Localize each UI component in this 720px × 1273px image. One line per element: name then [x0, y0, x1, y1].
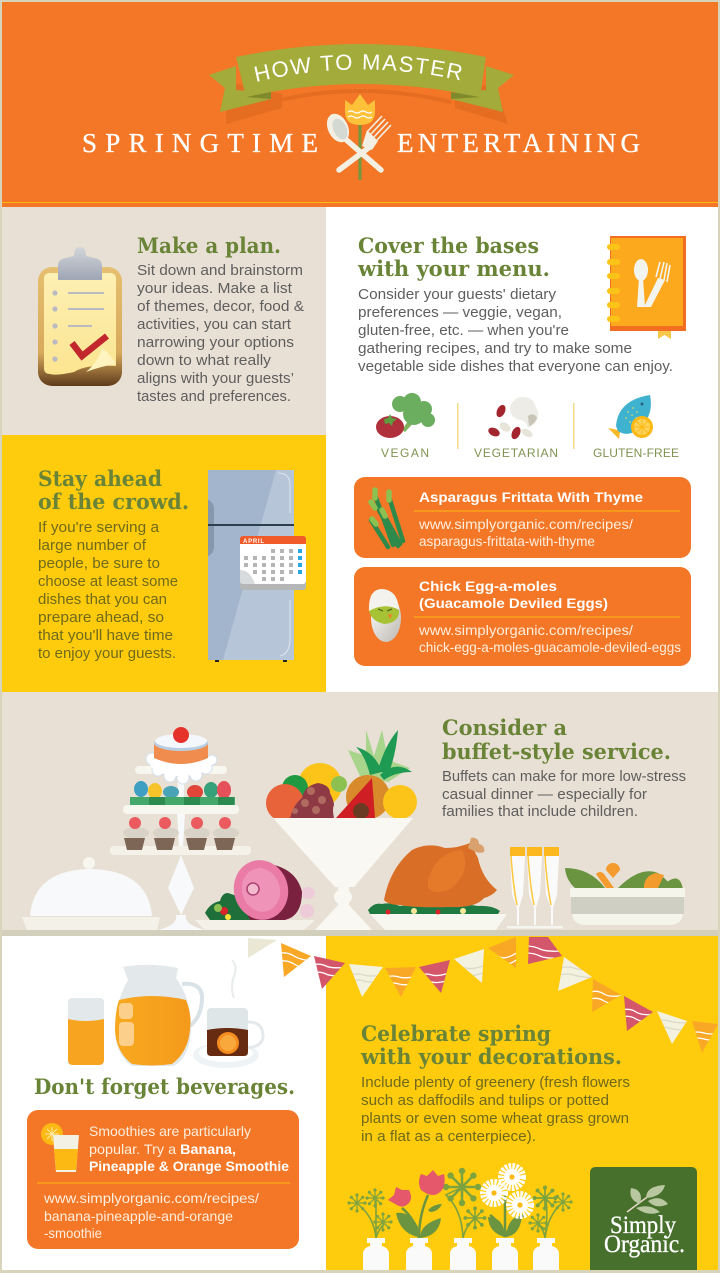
icon: smoothie glass — [41, 1123, 79, 1172]
heading: make a plan: Make a plan. — [137, 234, 281, 259]
body: celebrate: Include plenty of greenery (fresh flowers — [361, 1074, 630, 1091]
illustration: tea cup — [193, 960, 263, 1068]
icon: refrigerator — [208, 470, 294, 662]
logo leaves — [627, 1185, 668, 1214]
body: stay ahead: to enjoy your guests. — [38, 645, 176, 662]
illustration: salad bowl — [565, 863, 685, 925]
icon: menu notebook — [607, 236, 686, 339]
heading: cover the bases: Cover the bases — [358, 234, 539, 259]
card: smoothie — [27, 1110, 299, 1249]
icon: guacamole egg — [369, 589, 401, 642]
panel: buffet service — [2, 692, 718, 936]
heading: beverages: Don't forget beverages. — [34, 1075, 295, 1100]
illustration: covered dome platter — [22, 857, 160, 930]
divider — [573, 403, 574, 449]
heading: celebrate: with your decorations. — [360, 1045, 622, 1070]
icon: tulip with spoon and fork — [323, 94, 391, 180]
body: make a plan: activities, you can start — [137, 316, 292, 333]
logo: simply organic: Simply — [610, 1212, 676, 1239]
bunting garland — [248, 937, 720, 1053]
body: buffet: casual dinner — especially for — [442, 786, 647, 803]
flower vases — [347, 1168, 573, 1270]
body: cover the bases: vegetable side dishes that everyone can enjoy. — [358, 358, 673, 375]
heading: celebrate: Celebrate spring — [361, 1022, 551, 1047]
doily and cake — [146, 727, 217, 784]
easter eggs on grass — [130, 781, 235, 805]
card: smoothie: www.simplyorganic.com/recipes/ — [43, 1190, 259, 1206]
body: make a plan: down to what really — [137, 352, 272, 369]
body: make a plan — [137, 262, 304, 405]
title: entertaining: ENTERTAINING — [397, 128, 640, 158]
heading: stay ahead: Stay ahead — [38, 467, 162, 492]
body: make a plan: aligns with your guests’ — [137, 370, 294, 387]
label: vegetarian: VEGETARIAN — [474, 446, 558, 460]
body: stay ahead: large number of — [38, 537, 147, 554]
ribbon text: HOW TO MASTER — [254, 54, 462, 82]
body: cover the bases — [358, 286, 673, 375]
body: stay ahead: that you'll have time — [38, 627, 173, 644]
illustration: roast turkey — [368, 838, 507, 930]
panel: celebrate spring — [326, 936, 718, 1270]
label: vegan: VEGAN — [381, 446, 429, 460]
body: stay ahead: choose at least some — [38, 573, 178, 590]
panel: header — [2, 2, 718, 207]
icon: vegan tomato and broccoli — [376, 393, 435, 438]
icon: clipboard — [38, 247, 122, 386]
body: buffet — [442, 768, 686, 820]
body: buffet: families that include children. — [442, 803, 638, 820]
icon: calendar — [240, 536, 306, 590]
icon: vegetarian mushrooms and beans — [487, 397, 538, 441]
card: chick egg-a-moles: chick-egg-a-moles-guacamole-deviled-eggs — [419, 639, 681, 655]
card: smoothie: -smoothie — [44, 1225, 102, 1241]
text: smoothie: Smoothies are particularly — [89, 1123, 251, 1139]
illustration: fruit bowl — [266, 730, 417, 930]
heading: cover the bases — [357, 234, 550, 282]
body: celebrate: plants or even some wheat grass grown — [361, 1110, 629, 1127]
title: springtime: SPRINGTIME — [82, 128, 318, 158]
label: gluten-free: GLUTEN-FREE — [593, 446, 679, 460]
body: make a plan: Sit down and brainstorm — [137, 262, 303, 279]
heading: buffet — [442, 716, 671, 765]
icon: asparagus — [371, 490, 403, 547]
body: make a plan: tastes and preferences. — [137, 388, 291, 405]
body: make a plan: narrowing your options — [137, 334, 294, 351]
body: make a plan: your ideas. Make a list — [137, 280, 293, 297]
icon: calendar: APRIL — [243, 539, 264, 545]
card: chick egg-a-moles — [354, 567, 691, 666]
daisies — [484, 1168, 530, 1237]
body: stay ahead: people, be sure to — [38, 555, 160, 572]
body: buffet: Buffets can make for more low-stress — [442, 768, 686, 785]
ribbon banner — [209, 44, 514, 124]
body: celebrate: in a flat as a centerpiece). — [361, 1128, 536, 1145]
heading: stay ahead: of the crowd. — [38, 490, 189, 515]
illustration: tiered dessert stand — [110, 727, 251, 930]
tulips — [388, 1170, 445, 1238]
card: chick egg-a-moles: www.simplyorganic.com/recipes/ — [418, 622, 633, 638]
card: smoothie: popular. Try a Banana, — [89, 1141, 236, 1157]
panel: beverages — [2, 936, 326, 1270]
card: smoothie: Pineapple & Orange Smoothie — [89, 1158, 289, 1174]
illustration: juice pitcher — [115, 965, 202, 1066]
card: asparagus frittata: asparagus-frittata-with-thyme — [419, 533, 595, 549]
heading: stay ahead — [38, 467, 189, 515]
green sprigs — [347, 1168, 573, 1238]
cupcakes — [123, 817, 239, 850]
body: make a plan: of themes, decor, food & — [137, 298, 304, 315]
body: celebrate — [361, 1074, 630, 1145]
card: asparagus frittata: Asparagus Frittata With Thyme — [419, 489, 643, 505]
card: chick egg-a-moles: Chick Egg-a-moles — [419, 578, 557, 594]
heading: cover the bases: with your menu. — [357, 257, 550, 282]
body: cover the bases: gluten-free, etc. — when you're — [358, 322, 569, 339]
icon: gluten-free fish with lemon — [608, 395, 653, 439]
body: stay ahead: dishes that you can — [38, 591, 167, 608]
panel: make a plan — [2, 207, 326, 435]
heading: celebrate — [360, 1022, 622, 1070]
body: celebrate: such as daffodils and tulips or potted — [361, 1092, 609, 1109]
card: smoothie: banana-pineapple-and-orange — [44, 1208, 233, 1224]
logo: simply organic — [590, 1167, 697, 1270]
body: cover the bases: Consider your guests' dietary — [358, 286, 557, 303]
heading: buffet: buffet-style service. — [442, 740, 671, 765]
card: chick egg-a-moles: (Guacamole Deviled Eggs) — [419, 595, 608, 611]
card: asparagus frittata: www.simplyorganic.com/recipes/ — [418, 516, 633, 532]
heading: buffet: Consider a — [442, 716, 567, 741]
body: stay ahead: If you're serving a — [38, 519, 160, 536]
logo: simply organic: Organic. — [604, 1231, 685, 1258]
pennant waves — [280, 946, 720, 1040]
card: asparagus frittata — [354, 477, 691, 558]
body: cover the bases: preferences — veggie, vegan, — [358, 304, 562, 321]
white vases — [363, 1238, 559, 1270]
illustration: ham on platter — [195, 854, 315, 930]
illustration: champagne flutes — [507, 847, 563, 928]
illustration: glass of juice — [68, 998, 104, 1065]
panel: stay ahead — [2, 435, 326, 692]
body: stay ahead — [38, 519, 178, 662]
panel: cover the bases — [326, 207, 718, 692]
body: cover the bases: gathering recipes, and try to make some — [358, 340, 632, 357]
divider — [457, 403, 458, 449]
body: stay ahead: prepare ahead, so — [38, 609, 164, 626]
